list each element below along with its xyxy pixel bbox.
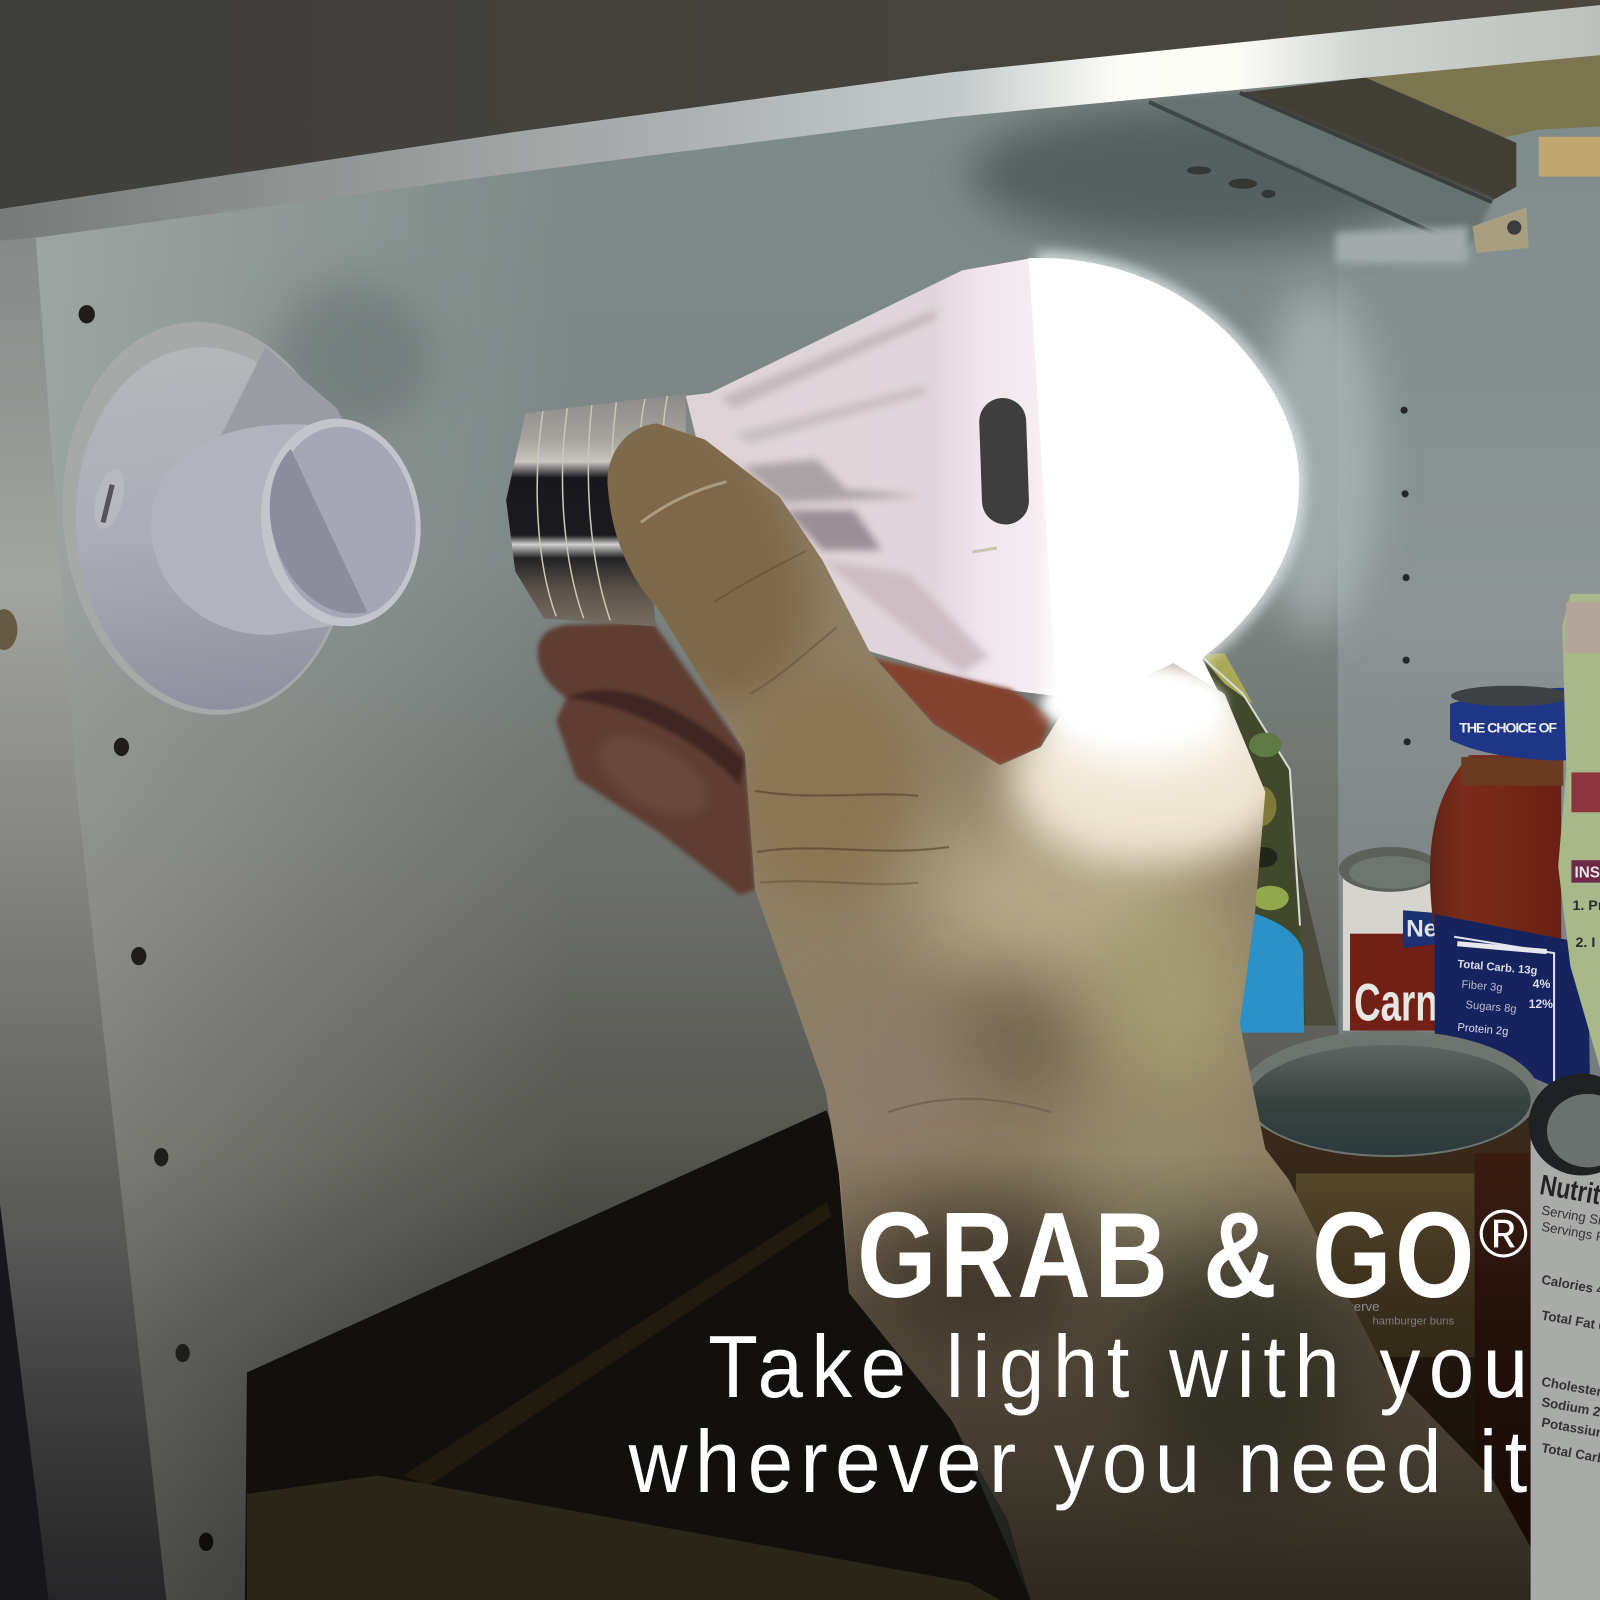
- headline: ®: [1479, 1197, 1528, 1272]
- pasta sauce jar: Sugars 8g: [1465, 999, 1517, 1016]
- Carnation can: Ne: [1406, 916, 1437, 943]
- dark lower-left corner: [0, 1204, 49, 1600]
- upper shelf rail hardware: [1149, 55, 1600, 263]
- pasta sauce jar: THE CHOICE OF: [1459, 721, 1557, 737]
- pasta sauce jar: 4%: [1533, 977, 1550, 991]
- pasta sauce jar: [1430, 686, 1590, 1090]
- green instruction bag on the right: [1558, 594, 1600, 1068]
- lower shelf: [245, 1110, 1031, 1600]
- bulb lit globe halo: [1036, 251, 1305, 699]
- headline: GRAB & GO: [857, 1186, 1474, 1323]
- subheadline: [628, 1317, 1528, 1510]
- socket base: [43, 307, 431, 729]
- red fold between thumb and palm: [872, 658, 1051, 765]
- bulb neck and shell: [686, 258, 1064, 697]
- hand and wrist: [608, 424, 1530, 1600]
- pasta sauce jar: Protein 2g: [1457, 1022, 1509, 1038]
- green instruction bag on the right: 2. I: [1576, 935, 1595, 951]
- bulb lit globe: [1029, 258, 1299, 711]
- blue bottle cap: [1237, 910, 1304, 1033]
- lit shelf edge: [0, 5, 1600, 241]
- Carnation can: Carn: [1354, 973, 1438, 1032]
- large foreground can: [1241, 1031, 1541, 1600]
- metal screw base: [506, 394, 686, 627]
- salad bag behind hand: [1200, 653, 1337, 1026]
- large foreground can: Preserve: [1327, 1299, 1380, 1314]
- cabinet ceiling: [0, 0, 1600, 209]
- darkened gradient behind text: [839, 1153, 1600, 1600]
- subheadline: Take light with you: [708, 1317, 1528, 1416]
- bright spill of light on palm: [1041, 668, 1224, 740]
- thumb and palm creases: [641, 482, 1051, 1112]
- subheadline: wherever you need it: [628, 1412, 1527, 1510]
- sensor window on bulb: [972, 397, 1030, 552]
- right side wall with shelf-pin holes: [1255, 102, 1600, 1122]
- large foreground can: hamburger buns: [1372, 1315, 1455, 1327]
- dim area below shelf by the rail: [969, 102, 1439, 245]
- pasta sauce jar: 12%: [1529, 997, 1553, 1011]
- shelf-pin holes on left wall: [79, 305, 213, 1551]
- Carnation can: [1339, 847, 1445, 1032]
- socket wall shadow: [270, 281, 434, 434]
- pasta sauce jar: Total Carb. 13g: [1457, 958, 1538, 977]
- bulb ribs: [720, 310, 989, 673]
- cabinet front edge panel: [0, 238, 166, 1600]
- pasta sauce jar: Fiber 3g: [1461, 979, 1503, 994]
- fingers behind bulb: [538, 622, 755, 895]
- right nutrition-facts can: [1529, 1073, 1600, 1600]
- wood knot at left edge: [0, 609, 17, 650]
